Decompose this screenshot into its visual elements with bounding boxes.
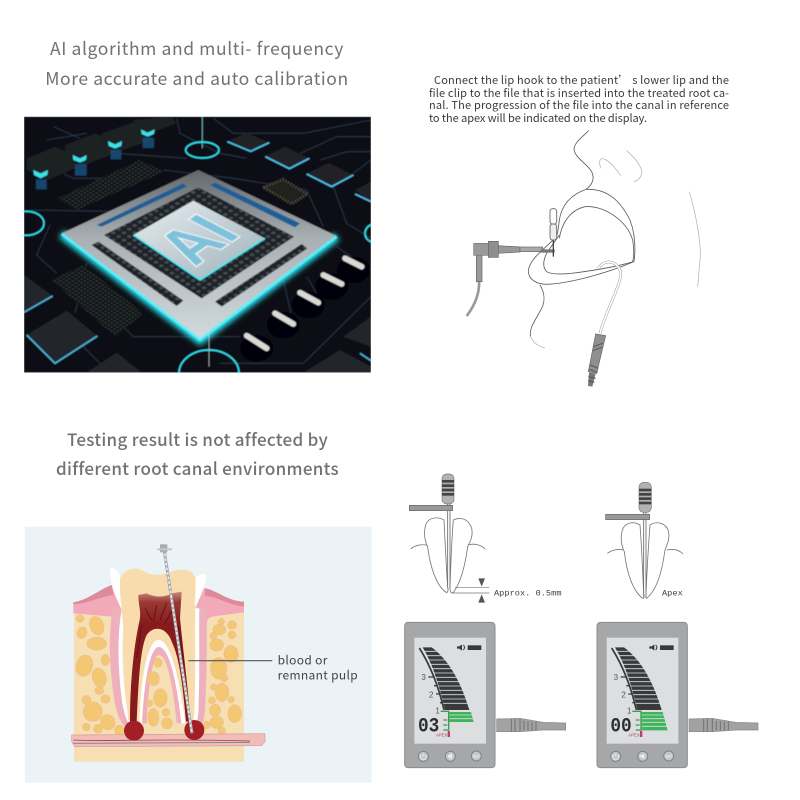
bone: [74, 605, 244, 762]
depth bars: [615, 647, 662, 710]
ligament: [115, 608, 203, 727]
device: reading 00: 1: [627, 707, 632, 716]
status icons: [649, 644, 654, 651]
depth bars: [423, 647, 469, 710]
green bars: [449, 712, 474, 722]
panel: AI chip photo: [24, 116, 371, 373]
small chips upper right: [227, 133, 371, 202]
title: AI algorithm: AI algorithm and multi- frequency: [50, 36, 344, 61]
text block: instructions: to the apex will be indicated on the display.: [429, 110, 647, 126]
device: reading 03: [405, 622, 566, 768]
pulp nerve branches: [137, 603, 184, 665]
cyan lights on blocks: [33, 129, 155, 178]
device: reading 00: [597, 622, 758, 768]
label: Approx. 0.5mm: Approx. 0.5mm: [494, 588, 562, 598]
title: AI algorithm: [45, 36, 349, 91]
face outline: [528, 131, 635, 337]
label: blood or remnant pulp: blood or: [278, 651, 328, 668]
buttons: SET: [665, 754, 673, 758]
device: reading 00: 2: [621, 690, 626, 699]
diagram: file approx 0.5mm from apex: [409, 474, 562, 603]
diagram: file at apex: [606, 482, 683, 598]
panel: tooth cross section: [25, 527, 372, 783]
buttons: [418, 751, 481, 761]
device: reading 03: 2: [429, 690, 434, 699]
device: reading 00: APEX: [628, 733, 640, 738]
green bars: [642, 712, 668, 730]
chip glow: [62, 234, 337, 340]
dotted component right: [263, 179, 307, 204]
small chips lower left: [24, 275, 371, 373]
text block: instructions: nal. The progression of the file into the canal in reference: [429, 97, 729, 113]
title: testing result: Testing result is not affected by: [67, 426, 328, 451]
blue reflections under lights: [36, 138, 154, 189]
bone blobs: [74, 615, 241, 736]
title: AI algorithm: More accurate and auto calibration: [45, 66, 349, 91]
pulp: [130, 592, 191, 722]
chip slots: [97, 183, 187, 227]
device: reading 03: 3: [421, 673, 426, 682]
dotted component top: [57, 160, 164, 210]
hex ring: [104, 187, 294, 298]
white crown margins: [110, 567, 123, 613]
top capacitor blocks: [27, 117, 177, 180]
resistors: [240, 257, 370, 362]
gums: [73, 585, 244, 638]
lip hook cable and plug: [588, 262, 621, 387]
glowing rings: [24, 140, 371, 373]
label: blood or remnant pulp: remnant pulp: [278, 666, 358, 683]
furcation layers: [139, 640, 185, 729]
file clip and cable: [467, 209, 557, 316]
illustration: face profile with lip hook and file clip: [467, 131, 700, 387]
device: reading 03: APEX: [436, 733, 448, 738]
label: blood or remnant pulp: [188, 651, 358, 683]
nerve band: [72, 734, 265, 747]
title: testing result: different root canal environments: [56, 455, 339, 480]
device: reading 03: 1: [435, 707, 440, 716]
reading digits: 00: [610, 716, 632, 739]
text block: instructions: file clip to the file that is inserted into the treated root ca-: [429, 85, 729, 101]
chip body: [62, 170, 337, 340]
title: testing result: [56, 426, 339, 480]
buttons: [611, 751, 674, 761]
AI letters: AI: [141, 206, 255, 274]
text block: instructions: Connect the lip hook to the patient’ s lower lip and the: [434, 72, 729, 88]
connector and cable: [689, 718, 758, 732]
device: reading 00: 3: [614, 673, 619, 682]
dentin: [120, 568, 196, 722]
connector and cable: [497, 718, 566, 732]
dotted component lower left: [52, 265, 143, 337]
status icons: [457, 644, 462, 651]
text block: instructions: [429, 72, 729, 126]
circuit traces: [30, 118, 371, 367]
AI plate: [133, 201, 265, 280]
buttons: SET: [473, 754, 481, 758]
apical blood: [124, 721, 144, 741]
label: Apex: Apex: [662, 588, 683, 598]
endodontic file: [157, 544, 192, 733]
reading digits: 03: [418, 716, 439, 739]
